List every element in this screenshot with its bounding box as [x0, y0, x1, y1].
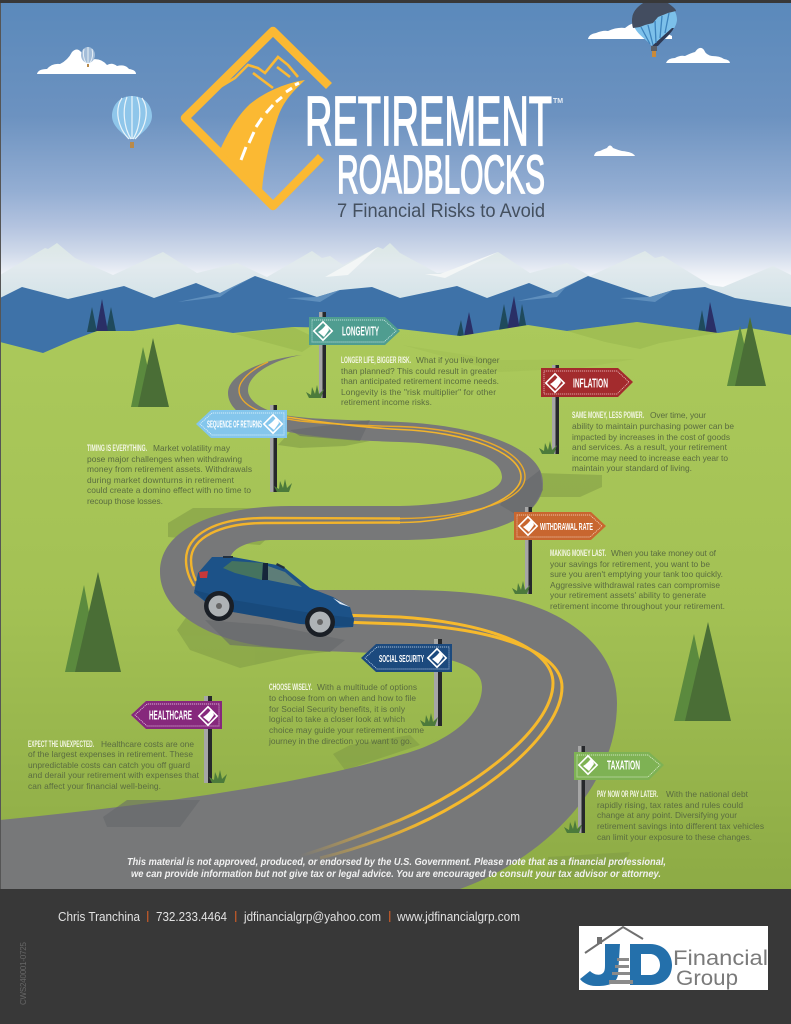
text: withdrawal rate: sure you aren't emptying your tank too quickly. [550, 569, 723, 579]
balloon: dark striped [632, 3, 677, 57]
contact details: www.jdfinancialgrp.com [396, 910, 520, 924]
disclaimer: This material is not approved, produced, or endorsed by the U.S. Government. Please note that as a financial professional, [127, 857, 666, 868]
hill shading [235, 322, 718, 372]
sign: social security: SOCIAL SECURITY [379, 653, 424, 665]
sign: withdrawal rate [512, 507, 606, 594]
logo roof [585, 927, 643, 953]
sky background [0, 0, 791, 345]
page top edge [0, 0, 791, 3]
text: taxation: can limit your exposure to these changes. [597, 832, 752, 842]
text: sequence of returns: TIMING IS EVERYTHING. [87, 443, 147, 453]
tree: left [65, 572, 121, 672]
text: social security: journey in the direction you want to go. [268, 736, 412, 746]
car [194, 556, 354, 637]
title: ROADBLOCKS [337, 145, 545, 205]
road centre lines [186, 362, 562, 858]
sign: withdrawal rate: WITHDRAWAL RATE [540, 521, 593, 533]
mountains: pale back range [0, 243, 791, 330]
JD Financial Group logo [579, 926, 768, 990]
text: sequence of returns: pose major challenges when withdrawing [87, 454, 242, 464]
text: social security: to choose from on when and how to file [269, 693, 416, 703]
distant pine trees [87, 296, 717, 336]
logo wordmark: Financial [673, 947, 768, 970]
text: longevity: than anticipated retirement income needs. [341, 376, 499, 386]
text: taxation [597, 789, 764, 842]
sign: inflation [539, 365, 633, 454]
contact details [58, 910, 520, 924]
text: sequence of returns: recoup those losses. [87, 496, 163, 506]
text: healthcare: of the largest expenses in retirement. These [28, 749, 193, 759]
text: inflation: impacted by increases in the cost of goods [572, 432, 730, 442]
text: withdrawal rate: your retirement assets' ability to generate [550, 590, 706, 600]
text: withdrawal rate: When you take money out of [611, 548, 717, 558]
sign: taxation [564, 746, 664, 833]
text: sequence of returns: during market downturns in retirement [87, 475, 235, 485]
text: taxation: With the national debt [666, 789, 749, 799]
sign: sequence of returns: SEQUENCE OF RETURNS [207, 420, 262, 430]
text: longevity [341, 355, 500, 407]
logo stairs [609, 958, 633, 984]
cloud: small [594, 146, 635, 156]
winding road [0, 355, 617, 889]
contact details: jdfinancialgrp@yahoo.com [243, 910, 381, 924]
sign: taxation: TAXATION [607, 758, 640, 772]
text: inflation: income may need to increase each year to [572, 453, 728, 463]
text: taxation: PAY NOW OR PAY LATER. [597, 789, 658, 799]
text: withdrawal rate: your savings for retirement, you want to be [550, 559, 710, 569]
mountains: ridge highlights [178, 276, 673, 302]
document code: CWS240001-0725 [19, 941, 28, 1005]
text: longevity: Longevity is the "risk multiplier" for other [341, 387, 496, 397]
balloon: light blue [112, 96, 152, 148]
tree: upper right [727, 317, 766, 386]
text: taxation: change at any point. Diversifying your [597, 810, 737, 820]
sign: inflation: INFLATION [573, 376, 608, 390]
text: sequence of returns: could create a domino effect with no time to [87, 485, 251, 495]
text: social security: With a multitude of options [317, 682, 417, 692]
car lights [199, 571, 208, 578]
subtitle: 7 Financial Risks to Avoid [337, 200, 545, 222]
title: TM [553, 98, 563, 105]
tree: upper left [131, 338, 169, 407]
text: taxation: rapidly rising, tax rates and rules could [597, 800, 743, 810]
logo: yellow road diamond [185, 31, 329, 206]
JD Financial Group logo: Group [676, 967, 738, 990]
logo road [220, 80, 305, 190]
logo D [630, 944, 672, 985]
cloud: upper left [37, 50, 136, 74]
cloud: right [666, 48, 730, 63]
text: healthcare: unpredictable costs can catch you off guard [28, 760, 190, 770]
title [305, 82, 563, 205]
road shadows on asphalt [103, 420, 543, 827]
text: social security: CHOOSE WISELY. [269, 682, 312, 692]
text: sequence of returns [87, 443, 252, 506]
text: healthcare [28, 739, 200, 791]
title: RETIREMENT [305, 82, 552, 160]
contact details: 732.233.4464 [156, 910, 227, 924]
text: taxation: retirement savings into different tax vehicles [597, 821, 764, 831]
car windows [223, 561, 263, 580]
text: inflation: maintain your standard of living. [572, 463, 692, 473]
green hills [0, 322, 791, 889]
tree: right [674, 622, 731, 721]
contact details: Chris Tranchina [58, 910, 140, 924]
text: longevity: than planned? This could result in greater [341, 366, 497, 376]
sign: longevity [306, 312, 400, 398]
sign: healthcare [131, 696, 227, 783]
sign: longevity: LONGEVITY [342, 324, 379, 338]
text: social security: logical to take a closer look at which [269, 714, 405, 724]
text: inflation: SAME MONEY, LESS POWER. [572, 410, 644, 420]
car wheels [204, 591, 234, 621]
footer band [0, 889, 791, 1024]
logo mountain outline [220, 57, 298, 88]
sign: social security [361, 639, 452, 726]
road shadows on grass [168, 432, 630, 880]
mountains: snow highlights [325, 247, 498, 278]
logo J [580, 944, 620, 986]
left page edge [0, 3, 1, 889]
car body [194, 557, 354, 628]
sign: healthcare: HEALTHCARE [149, 708, 192, 722]
disclaimer [127, 857, 666, 880]
sign: sequence of returns [196, 405, 292, 492]
text: withdrawal rate: retirement income throughout your retirement. [550, 601, 725, 611]
text: social security: for Social Security benefits, it is only [269, 704, 406, 714]
mountains: blue front range [0, 276, 791, 360]
text: social security: choice may guide your retirement income [269, 725, 424, 735]
text: healthcare: EXPECT THE UNEXPECTED. [28, 739, 94, 749]
text: inflation [572, 410, 734, 473]
text: sequence of returns: money from retirement assets. Withdrawals [87, 464, 252, 474]
cloud: top right [588, 23, 672, 39]
text: longevity: What if you live longer [416, 355, 500, 365]
text: sequence of returns: Market volatility may [153, 443, 231, 453]
text: withdrawal rate [550, 548, 725, 611]
disclaimer: we can provide information but not give tax or legal advice. You are encouraged to consult your tax advisor or attorney. [131, 869, 661, 880]
text: inflation: ability to maintain purchasing power can be [572, 421, 734, 431]
balloon: small pale [81, 47, 95, 67]
text: longevity: LONGER LIFE, BIGGER RISK. [341, 355, 411, 365]
text: healthcare: Healthcare costs are one [101, 739, 194, 749]
text: withdrawal rate: MAKING MONEY LAST. [550, 548, 606, 558]
text: longevity: retirement income risks. [341, 397, 432, 407]
text: social security [268, 682, 424, 746]
text: inflation: and services. As a result, your retirement [572, 442, 728, 452]
text: inflation: Over time, your [650, 410, 706, 420]
logo road dashes [241, 83, 299, 160]
text: healthcare: and derail your retirement with expenses that [28, 770, 200, 780]
text: withdrawal rate: Aggressive withdrawal rates can compromise [550, 580, 720, 590]
text: healthcare: can affect your financial well-being. [28, 781, 161, 791]
